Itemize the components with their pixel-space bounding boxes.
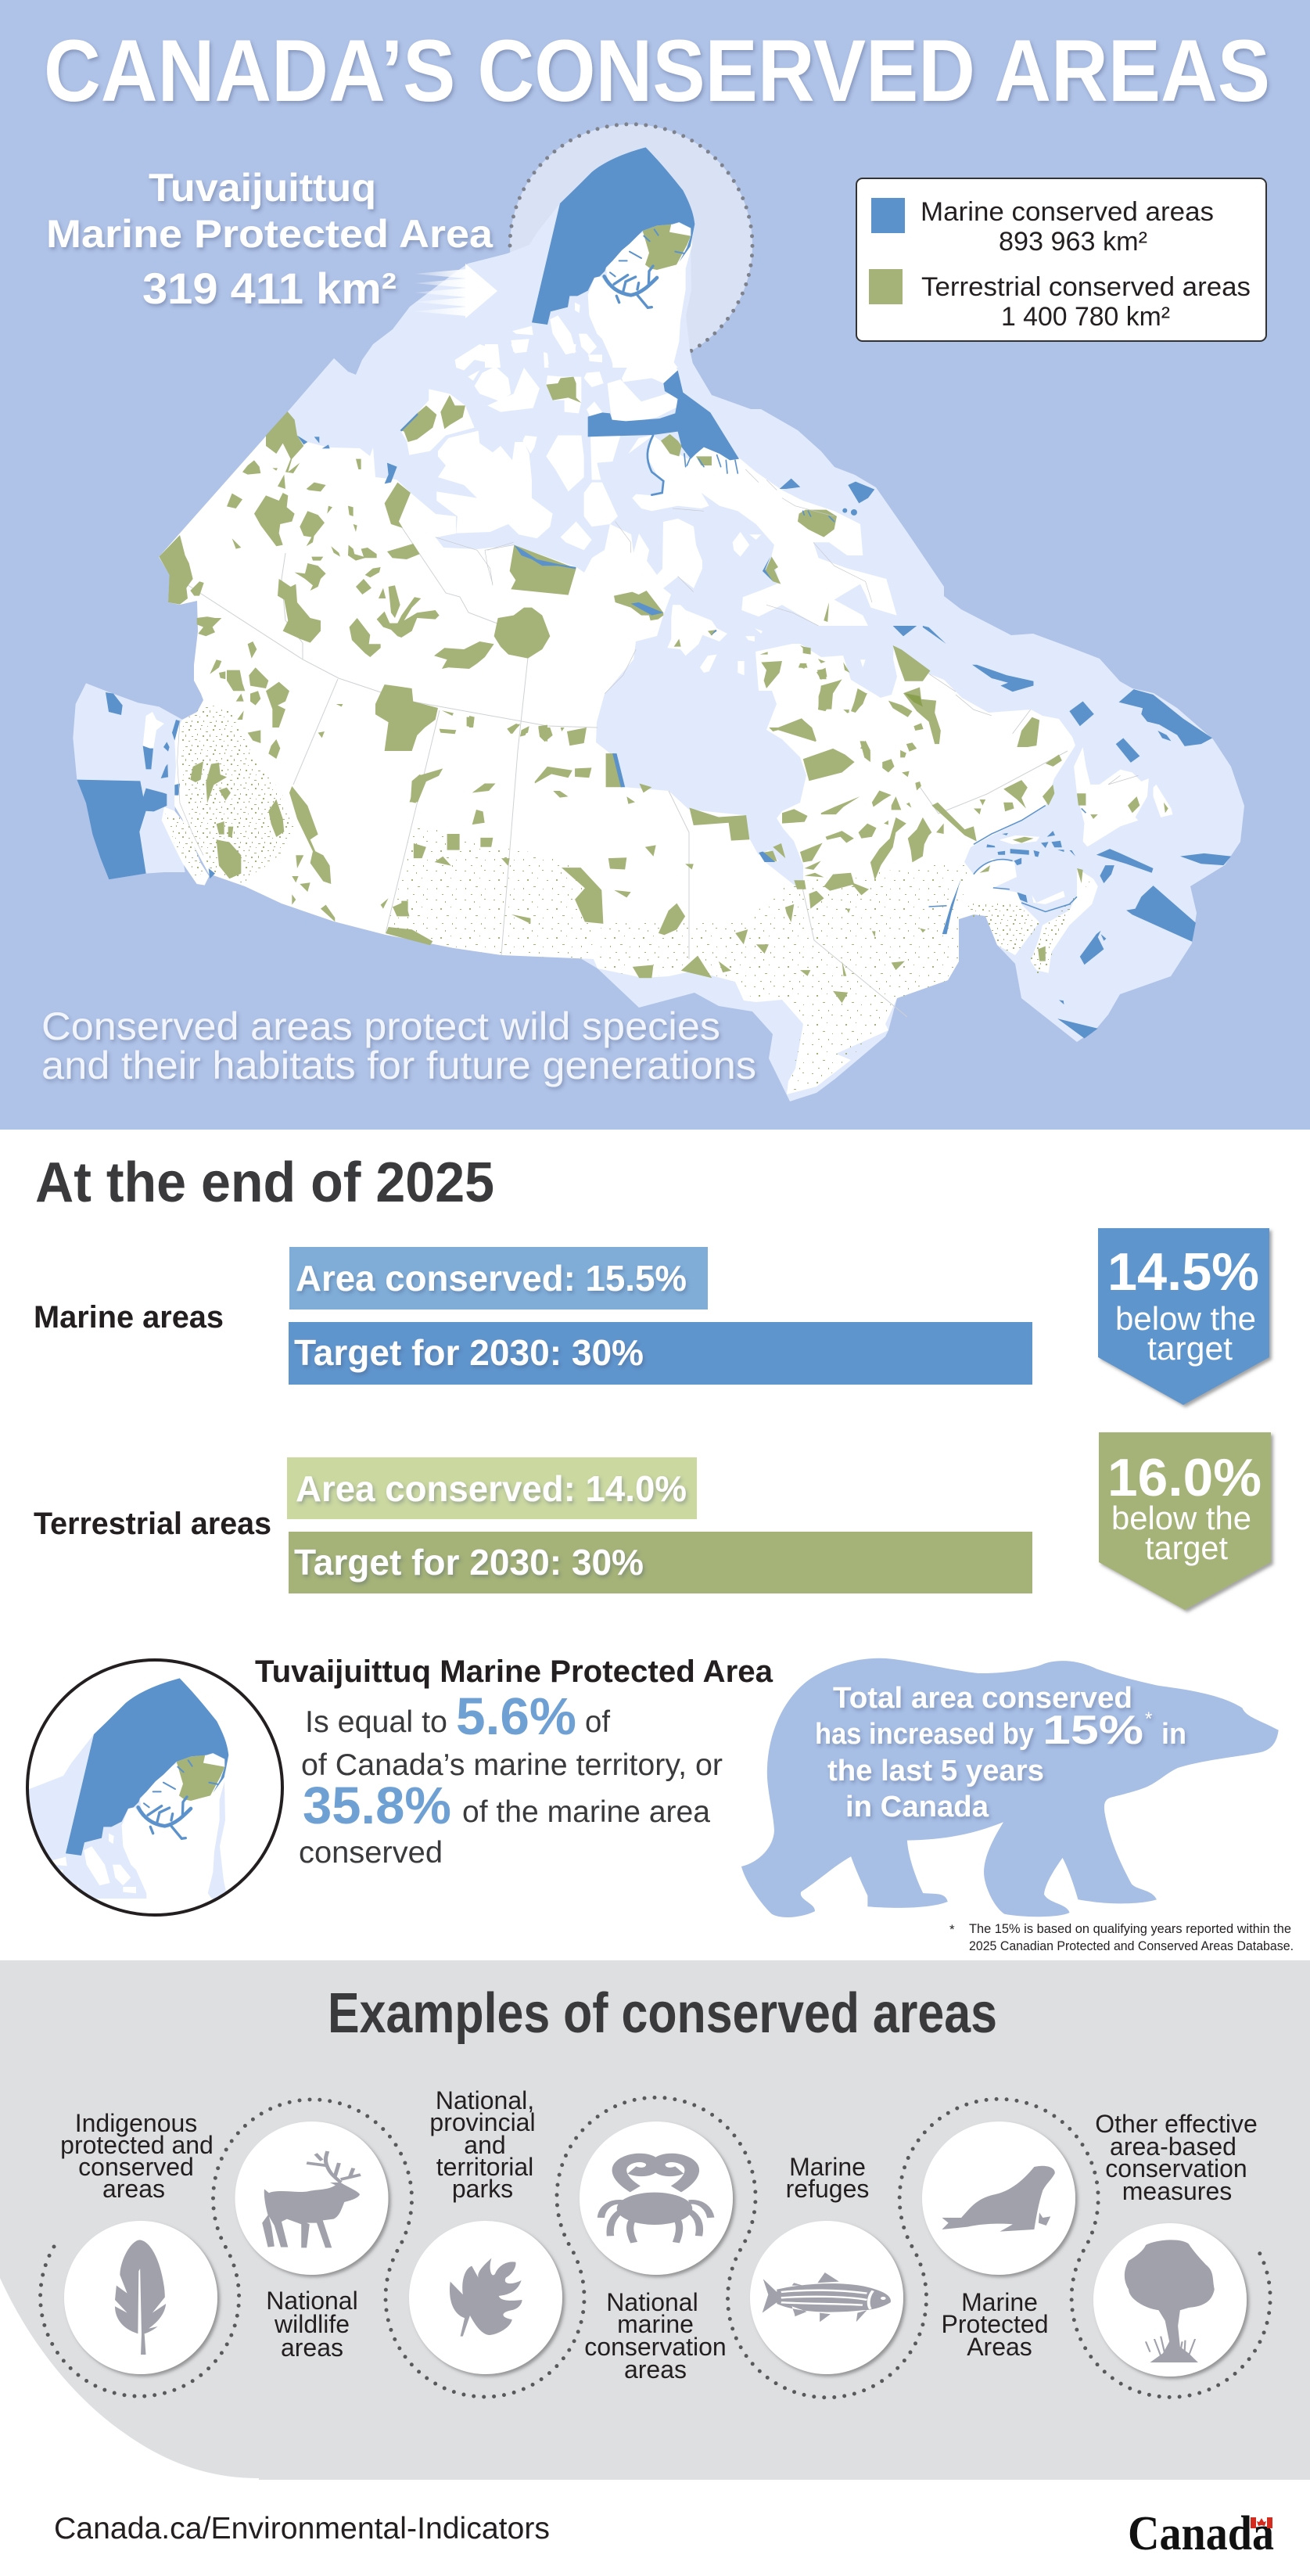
facts heading: Tuvaijuittuq Marine Protected Area — [255, 1654, 773, 1689]
label: Indigenous protected and conserved areas: protected and — [60, 2131, 214, 2159]
label: National wildlife areas: wildlife — [274, 2310, 350, 2338]
Tuvaijuittuq facts: conserved — [299, 1836, 443, 1870]
label: National, provincial and territorial parks: National, — [436, 2086, 534, 2114]
label: Indigenous protected and conserved areas: areas — [102, 2175, 165, 2203]
map label: Tuvaijuittuq: 319 411 km² — [142, 264, 397, 313]
statistic: 35.8%: 35.8% — [303, 1777, 451, 1835]
label: marine areas: Marine areas — [34, 1300, 224, 1335]
callout: marine gap — [1098, 1228, 1269, 1405]
coastline detail — [178, 469, 1138, 855]
label: Other effective area-based conservation measures: Other effective — [1095, 2110, 1258, 2138]
label: National, provincial and territorial parks: and — [464, 2131, 506, 2159]
arrow — [414, 264, 497, 318]
facts text: Is equal to — [305, 1705, 447, 1739]
Tuvaijuittuq facts: of Canada’s marine territory, or — [301, 1748, 723, 1782]
dotted wave — [41, 2097, 1270, 2398]
map caption — [41, 1004, 756, 1087]
icon: leaf — [450, 2258, 522, 2337]
label: terrestrial areas: Terrestrial areas — [34, 1507, 271, 1541]
legend text: 1 400 780 km² — [1001, 302, 1170, 332]
label: Other effective area-based conservation measures: measures — [1122, 2177, 1232, 2205]
Tuvaijuittuq facts — [255, 1654, 773, 1870]
bar: marine conserved: Area conserved: 15.5% — [296, 1258, 687, 1299]
bear text: * — [1145, 1708, 1152, 1730]
bear text — [815, 1682, 1186, 1823]
label: National marine conservation areas: conservation — [584, 2333, 727, 2361]
bar: terrestrial conserved — [287, 1457, 697, 1519]
label: National marine conservation areas: marine — [617, 2310, 694, 2338]
bar: terrestrial target: Target for 2030: 30% — [294, 1542, 644, 1583]
bear text: has increased by — [815, 1718, 1034, 1751]
callout: terrestrial gap: target — [1145, 1529, 1228, 1566]
callout: terrestrial gap: below the — [1111, 1500, 1251, 1536]
provincial boundaries — [170, 526, 1068, 1017]
highlight ring around Tuvaijuittuq — [510, 124, 752, 367]
map label: Tuvaijuittuq: Marine Protected Area — [46, 212, 493, 256]
label: National marine conservation areas: National — [606, 2288, 698, 2316]
heading: examples: Examples of conserved areas — [328, 1982, 997, 2045]
callout: marine gap: below the — [1115, 1300, 1256, 1337]
footnote: The 15% is based on qualifying years reported within the — [969, 1921, 1291, 1936]
map caption: Conserved areas protect wild species — [41, 1004, 720, 1048]
callout: marine gap: target — [1147, 1330, 1233, 1367]
flag — [1251, 2517, 1272, 2528]
dense small conserved areas — [164, 704, 1093, 1091]
marine conserved areas — [77, 370, 1231, 1038]
statistic: 5.6%: 5.6% — [456, 1687, 576, 1746]
map of Canada — [73, 124, 1244, 1101]
label: Indigenous protected and conserved areas — [60, 2109, 214, 2203]
panel: examples of conserved areas — [0, 1960, 1310, 2480]
legend swatch: terrestrial — [869, 269, 903, 304]
label: National marine conservation areas — [584, 2288, 727, 2384]
terrestrial conserved areas — [159, 377, 1168, 1003]
label: National wildlife areas: areas — [281, 2333, 343, 2362]
inset map: Tuvaijuittuq — [19, 1660, 282, 1915]
Tuvaijuittuq facts: of — [585, 1705, 610, 1739]
legend — [856, 178, 1266, 341]
label: Marine refuges: Marine — [789, 2153, 866, 2181]
label: National wildlife areas: National — [266, 2287, 358, 2315]
bear text: Total area conserved — [833, 1682, 1132, 1715]
Tuvaijuittuq facts: of the marine area — [462, 1795, 710, 1829]
label: Marine Protected Areas — [942, 2288, 1048, 2361]
legend text: 893 963 km² — [999, 227, 1147, 257]
heading: at the end of 2025: At the end of 2025 — [35, 1151, 494, 1214]
label: Marine Protected Areas: Areas — [967, 2333, 1032, 2361]
map label: Tuvaijuittuq — [46, 166, 493, 313]
label: Marine Protected Areas: Protected — [942, 2310, 1048, 2338]
label: Marine refuges: refuges — [786, 2175, 869, 2203]
panel: map background — [0, 0, 1310, 1130]
icon: crab — [601, 2157, 711, 2243]
darker overlapping conserved areas — [678, 429, 923, 706]
label: Other effective area-based conservation measures — [1095, 2110, 1258, 2205]
bar: marine conserved — [289, 1247, 708, 1310]
callout: terrestrial gap: 16.0% — [1107, 1448, 1262, 1507]
map label: Tuvaijuittuq: Tuvaijuittuq — [149, 166, 376, 210]
bar: marine target — [289, 1322, 1032, 1385]
icon: feather — [115, 2240, 166, 2355]
bear text: in — [1161, 1718, 1186, 1751]
marine territory: sea — [73, 147, 1244, 1101]
label: Other effective area-based conservation measures: area-based — [1110, 2132, 1236, 2161]
label: National, provincial and territorial parks: provincial — [429, 2108, 536, 2136]
footer link: Canada.ca/Environmental-Indicators — [54, 2512, 550, 2545]
icon: caribou — [262, 2151, 361, 2247]
bear text: the last 5 years — [827, 1755, 1044, 1787]
icon: fish — [763, 2272, 891, 2322]
legend text — [921, 197, 1251, 332]
legend swatch: marine — [871, 198, 905, 233]
bar: terrestrial conserved: Area conserved: 14.0% — [296, 1468, 687, 1509]
map caption: and their habitats for future generations — [41, 1044, 756, 1087]
label: National, provincial and territorial parks: parks — [452, 2175, 513, 2203]
label: National, provincial and territorial parks: territorial — [436, 2153, 533, 2181]
bar: marine target: Target for 2030: 30% — [294, 1332, 644, 1373]
footnote: * — [949, 1922, 955, 1937]
legend text: Terrestrial conserved areas — [921, 272, 1251, 302]
callout: terrestrial gap — [1099, 1432, 1271, 1610]
icon: seal — [942, 2166, 1055, 2232]
label: National, provincial and territorial parks — [429, 2086, 536, 2203]
Canada wordmark: Canada — [1128, 2507, 1274, 2560]
label: Other effective area-based conservation measures: conservation — [1105, 2154, 1247, 2183]
polar bear callout — [741, 1658, 1279, 1917]
callout: marine gap: 14.5% — [1107, 1242, 1259, 1302]
Tuvaijuittuq detail — [485, 147, 694, 368]
label: Marine refuges — [786, 2153, 869, 2203]
label: Indigenous protected and conserved areas: conserved — [78, 2153, 194, 2181]
white discs — [64, 2122, 1247, 2377]
footnote: 2025 Canadian Protected and Conserved Areas Database. — [969, 1938, 1294, 1953]
icon: tree — [1125, 2240, 1215, 2362]
legend text: Marine conserved areas — [921, 197, 1214, 227]
footnote — [949, 1921, 1294, 1953]
label: Indigenous protected and conserved areas: Indigenous — [75, 2109, 197, 2137]
bar: terrestrial target — [289, 1532, 1032, 1593]
label: National marine conservation areas: areas — [624, 2355, 687, 2384]
bear text: in Canada — [845, 1791, 989, 1823]
land — [143, 344, 1172, 1094]
bear text: 15% — [1043, 1708, 1143, 1753]
label: Marine Protected Areas: Marine — [961, 2288, 1038, 2316]
label: National wildlife areas — [266, 2287, 358, 2362]
